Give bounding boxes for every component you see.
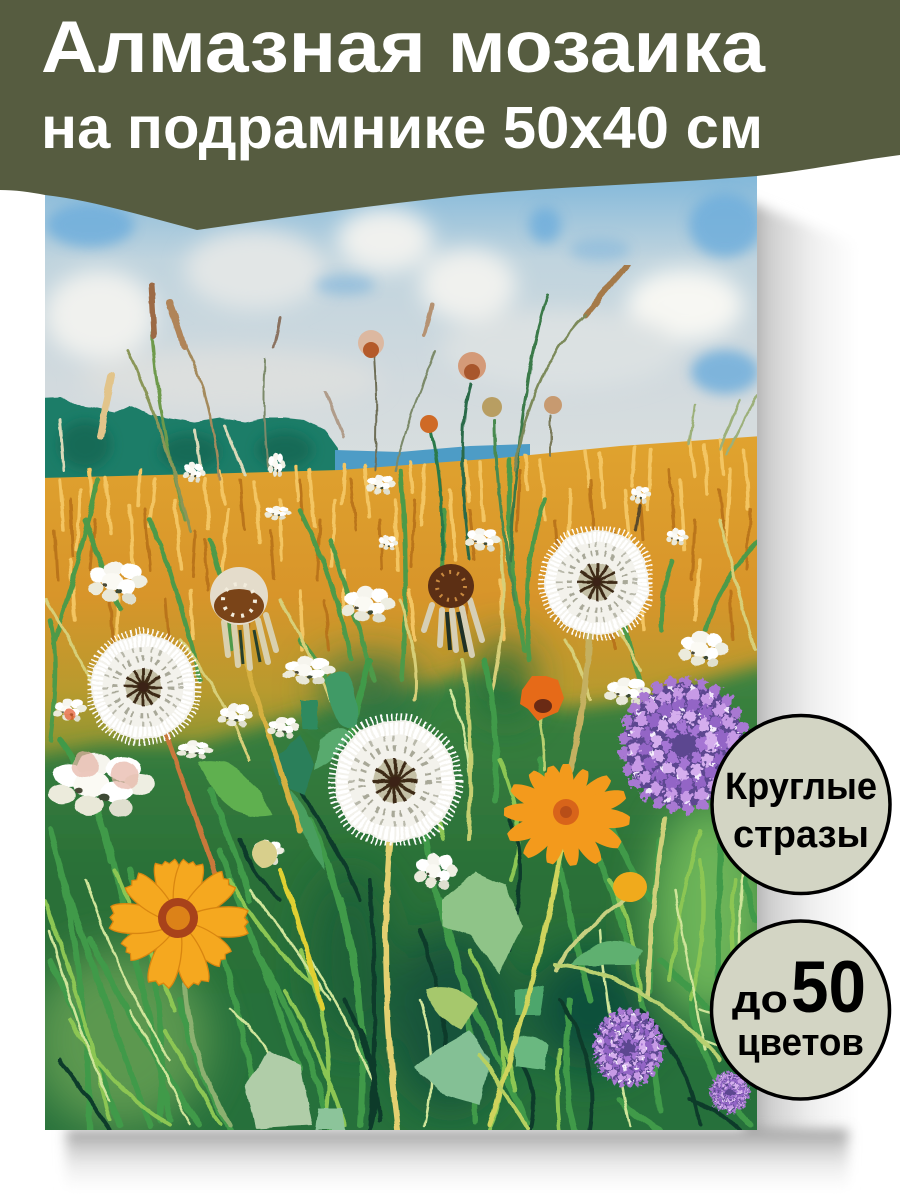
wheat field — [40, 436, 762, 790]
leaves — [198, 671, 642, 1130]
yellow flower — [109, 859, 248, 989]
badge: round rhinestones: Круглые — [725, 766, 877, 808]
pale blades — [50, 690, 755, 1125]
pale blades in wheat — [45, 520, 755, 760]
mid green blades — [50, 660, 755, 1130]
sky — [45, 176, 757, 476]
purple clover — [595, 682, 748, 1111]
painting: meadow — [20, 176, 780, 1150]
subtitle: на подрамнике 50х40 см — [41, 95, 763, 161]
badge: round rhinestones: стразы — [733, 814, 869, 856]
brown seed heads — [210, 330, 562, 668]
badge: up to 50 colours: до — [732, 979, 788, 1021]
wheat strokes light — [60, 440, 748, 650]
clouds — [45, 208, 743, 410]
stems — [163, 630, 720, 1130]
pink tint on cluster — [64, 708, 139, 789]
orange flower — [504, 764, 631, 867]
trees shade — [59, 421, 313, 470]
banner — [0, 0, 900, 230]
white clover clusters — [48, 452, 728, 890]
treeline — [40, 397, 345, 482]
dandelion puffs — [88, 527, 652, 845]
bright blades — [45, 760, 750, 1130]
small orange flowers — [252, 676, 647, 902]
painted scene — [45, 265, 760, 1130]
meadow light and dark masses — [30, 640, 770, 1130]
badge: up to 50 colours: 50 — [791, 947, 866, 1028]
title: Алмазная мозаика — [41, 7, 767, 88]
distant hill — [335, 444, 530, 470]
sky blue patches — [46, 193, 761, 394]
canvas shadow — [66, 200, 870, 1190]
badge: up to 50 colours — [712, 921, 890, 1099]
green blades in wheat — [50, 460, 760, 740]
green meadow base — [20, 660, 780, 1150]
tall grasses with seed heads — [60, 265, 757, 600]
badge: up to 50 colours: цветов — [737, 1022, 864, 1064]
wheat strokes dark — [55, 470, 750, 650]
badge: round rhinestones — [712, 716, 890, 894]
dark blades — [60, 790, 740, 1130]
